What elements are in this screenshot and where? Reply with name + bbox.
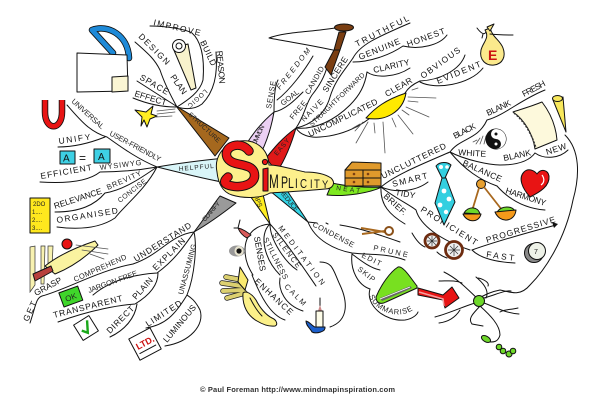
right: neat cluster: HARMONY	[504, 185, 548, 208]
icon: A equals A: =	[79, 151, 86, 165]
right: neat cluster: PROFICIENT	[419, 204, 479, 247]
branch: neat wedge	[327, 183, 382, 196]
icon: scroll	[172, 40, 196, 90]
right: neat cluster: NEW	[545, 141, 568, 157]
right: neat cluster: FAST	[486, 249, 515, 263]
icon: box with blue arc	[77, 28, 129, 92]
left: helpful cluster: RELEVANCE	[53, 186, 103, 211]
top centre: easy and common cluster: HONEST	[405, 26, 446, 49]
bottom left: clarify cluster: COMPREHEND	[72, 252, 128, 284]
bottom right: condense cluster: PRUNE	[373, 243, 409, 259]
branch: clarify wedge	[194, 196, 236, 232]
top centre: easy and common cluster: GENUINE	[357, 36, 402, 62]
icon: hammer with flag	[269, 24, 354, 75]
icon: OK box	[59, 286, 83, 307]
icon: balance scale	[463, 180, 516, 221]
left: helpful cluster: WYSIWYG	[99, 158, 142, 172]
branch: common wedge: COMMON	[249, 124, 267, 150]
central title: simplicity: T	[314, 178, 320, 191]
bottom left: clarify cluster: JARGON-FREE	[87, 269, 139, 295]
bottom left: clarify cluster: GET	[21, 300, 39, 323]
top left: design cluster: IMPROVE	[153, 17, 202, 38]
central title: simplicity: L	[288, 174, 294, 191]
bottom centre: tips cluster	[245, 224, 345, 327]
branch: clarify wedge: CLARIFY	[201, 200, 222, 223]
central title: simplicity: M	[269, 172, 279, 193]
right: neat cluster: BLANK	[485, 98, 513, 118]
right: neat cluster	[379, 78, 578, 298]
top left: design cluster: DESIGN	[137, 31, 172, 67]
icon: cream page	[513, 102, 557, 149]
icon: neuron	[435, 272, 519, 357]
top centre: easy and common cluster: SINCERE	[320, 55, 350, 94]
top centre: easy and common cluster: NAIVE	[299, 97, 325, 123]
bottom right: condense cluster: EDIT	[360, 251, 383, 268]
icon: tongue	[234, 220, 251, 238]
icon: to-do note: 1....	[32, 210, 42, 216]
icon: sun	[353, 88, 436, 153]
icon: to-do note: 2....	[32, 218, 42, 224]
icon: clock	[524, 242, 546, 262]
top left: design cluster: PLAN	[168, 72, 189, 96]
bottom centre: tips cluster: MEDITATION	[276, 224, 327, 287]
left: helpful cluster: UNIVERSAL	[70, 97, 106, 131]
icon: pale foot	[243, 292, 277, 326]
right: neat cluster: BRIEF.	[382, 191, 409, 217]
bottom left: clarify cluster: LIMITED	[144, 298, 183, 329]
top centre: easy and common cluster: SENSE	[264, 80, 278, 109]
left: helpful cluster: CONCISE	[117, 178, 148, 205]
bottom left: clarify cluster: UNASSUMING	[176, 243, 198, 296]
bottom centre: tips cluster: CALM	[283, 282, 308, 308]
bottom left: clarify cluster: UNDERSTAND	[132, 220, 193, 264]
icon: red U	[45, 100, 62, 126]
icon: limited box: LTD.	[134, 334, 156, 352]
icon: cricket bat, ball and stumps	[30, 239, 108, 292]
icon: green stapler	[376, 267, 417, 303]
top centre: easy and common cluster: CLARITY	[372, 57, 411, 75]
top centre: easy and common cluster: CLEAR	[383, 75, 414, 99]
bottom left: clarify cluster	[21, 220, 201, 346]
icon: to-do note: 3....	[32, 226, 42, 232]
icon: yellow tube	[552, 96, 566, 132]
bottom right: condense cluster: SKIP	[356, 264, 377, 284]
top left: design cluster: REASON	[215, 50, 227, 84]
right: neat cluster: TIDY	[395, 187, 416, 200]
branch: helpful wedge: HELPFUL	[179, 163, 214, 173]
right: neat cluster: PROGRESSIVE	[485, 214, 557, 245]
bottom centre: tips cluster: ENHANCE	[253, 276, 296, 317]
left: helpful cluster: EFFICIENT	[40, 162, 93, 181]
branch: structure wedge: STRUCTURE	[187, 111, 222, 145]
top centre: easy and common cluster: CANDID	[303, 64, 327, 96]
top centre: easy and common cluster: STRAIGHTFORWARD	[309, 72, 367, 128]
right: neat cluster: SMART	[391, 171, 428, 189]
bottom centre: tips cluster: SILENCE	[270, 231, 303, 270]
branch: helpful wedge	[157, 158, 225, 182]
icon: yin yang	[473, 129, 506, 149]
left: helpful cluster	[40, 97, 163, 228]
icon: scissors	[361, 227, 393, 235]
copyright credit: © Paul Foreman http://www.mindmapinspiration.com	[200, 385, 395, 394]
bottom left: clarify cluster: TRANSPARENT	[52, 293, 123, 320]
top left: design cluster: SPACE	[138, 72, 171, 97]
central title: simplicity	[216, 141, 333, 197]
right: neat cluster: WHITE	[458, 147, 487, 159]
bottom left: clarify cluster: PLAIN	[130, 275, 155, 301]
bottom left: clarify cluster: GRASP	[32, 275, 64, 298]
branch: structure wedge	[176, 106, 229, 156]
left: helpful cluster: UNIFY	[58, 132, 91, 146]
central title: simplicity: P	[281, 172, 288, 192]
top centre: easy and common cluster	[264, 13, 483, 139]
icon: candle	[306, 298, 325, 333]
left: helpful cluster: BREVITY	[105, 169, 143, 192]
icon: money bag with E: E	[488, 47, 497, 63]
branch: tips wedge	[248, 190, 270, 224]
right: neat cluster: UNCLUTTERED	[379, 141, 448, 181]
branch: reduce wedge	[270, 186, 308, 222]
branch: tips wedge: TIPS	[251, 193, 264, 209]
icon: eye	[229, 246, 245, 256]
top centre: easy and common cluster: FREE	[288, 99, 309, 121]
right: neat cluster: BALANCE	[461, 158, 504, 184]
icon: A equals A	[60, 149, 110, 165]
central title: simplicity: C	[300, 178, 307, 191]
branch: easy wedge	[266, 128, 296, 172]
central title: simplicity: Y	[322, 179, 328, 191]
right: neat cluster: BLACK	[451, 121, 478, 141]
bottom centre: tips cluster: SENSES	[252, 236, 268, 272]
top centre: easy and common cluster: TRUTHFUL	[353, 13, 411, 49]
bottom right: condense cluster	[308, 220, 418, 321]
icon: checkbox	[74, 316, 98, 340]
bottom centre: tips cluster: STILLNESS	[261, 236, 290, 281]
icon: A equals A: A	[98, 152, 105, 163]
bottom left: clarify cluster: DIRECT	[104, 304, 136, 335]
bottom left: clarify cluster: LUMINOUS	[161, 302, 198, 344]
icon: OK box: OK	[64, 291, 79, 304]
icon: wheels	[412, 233, 462, 258]
bottom left: clarify cluster: EXPLAIN	[150, 236, 187, 272]
top left: design cluster: LOGIC	[186, 88, 208, 109]
branch: common wedge	[247, 112, 274, 151]
icon: heart	[521, 170, 549, 197]
icon: tie	[435, 162, 455, 225]
icon: A equals A: A	[63, 154, 70, 164]
icon: to-do note: 2DO	[33, 202, 46, 208]
left: helpful cluster: USER-FRIENDLY	[108, 129, 163, 164]
icon: drawers	[345, 162, 381, 186]
central title: simplicity: I	[310, 178, 313, 191]
icon: star	[135, 106, 175, 127]
top centre: easy and common cluster: OBVIOUS	[418, 45, 462, 81]
icon: clock: 7	[534, 249, 538, 256]
icon: hand	[222, 267, 248, 298]
top left: design cluster	[133, 17, 227, 109]
arrow: red	[418, 287, 459, 308]
right: neat cluster: BLANK	[502, 147, 532, 163]
right: neat cluster: FRESH	[520, 78, 547, 99]
top centre: easy and common cluster: EVIDENT	[435, 59, 482, 86]
top centre: easy and common cluster: UNCOMPLICATED	[306, 96, 379, 139]
branch: easy wedge: EASY	[273, 137, 292, 157]
icon: money bag with E	[477, 24, 513, 65]
bottom right: condense cluster: SUMMARISE	[370, 294, 412, 314]
icon: limited box	[129, 328, 161, 360]
icon: to-do note	[30, 198, 50, 233]
top left: design cluster: EFFECT	[133, 88, 168, 108]
left: helpful cluster: ORGANISED	[56, 205, 119, 225]
branch: reduce wedge: REDUCE	[277, 189, 300, 214]
top centre: easy and common cluster: GOAL	[279, 88, 301, 108]
top left: design cluster: BUILD	[198, 39, 219, 67]
central title: simplicity: I	[295, 175, 298, 191]
branch: neat wedge: NEAT	[336, 185, 360, 195]
bottom right: condense cluster: CONDENSE	[311, 220, 356, 249]
top centre: easy and common cluster: FREEDOM	[274, 46, 313, 91]
